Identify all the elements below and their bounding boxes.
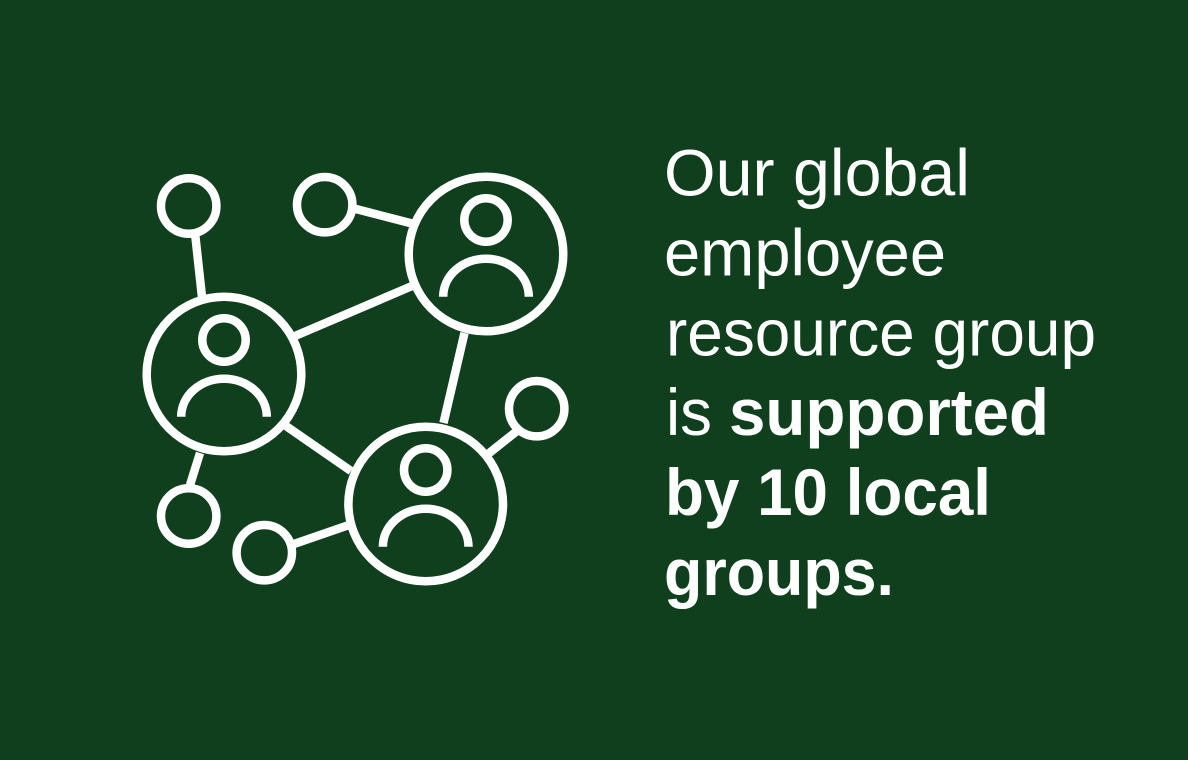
small node: right [509,381,564,436]
small node: bottom left [161,488,216,544]
person node: left [147,297,301,451]
text block: statement [664,136,1096,609]
person node: bottom [348,427,503,581]
text block: statement: by 10 local [665,455,991,529]
icon: employee network [147,177,564,581]
connector lines [190,208,517,544]
text block: statement: resource group [666,296,1096,370]
text block: statement: supported [729,375,1049,449]
text block: statement: is [666,375,712,449]
text block: statement: groups. [664,535,894,609]
small node: top left [161,178,216,234]
small node: top middle [297,177,352,232]
text block: statement: Our global [664,136,970,210]
small node: bottom [237,525,292,580]
person node: top right [409,177,563,331]
text block: statement: employee [664,216,946,290]
